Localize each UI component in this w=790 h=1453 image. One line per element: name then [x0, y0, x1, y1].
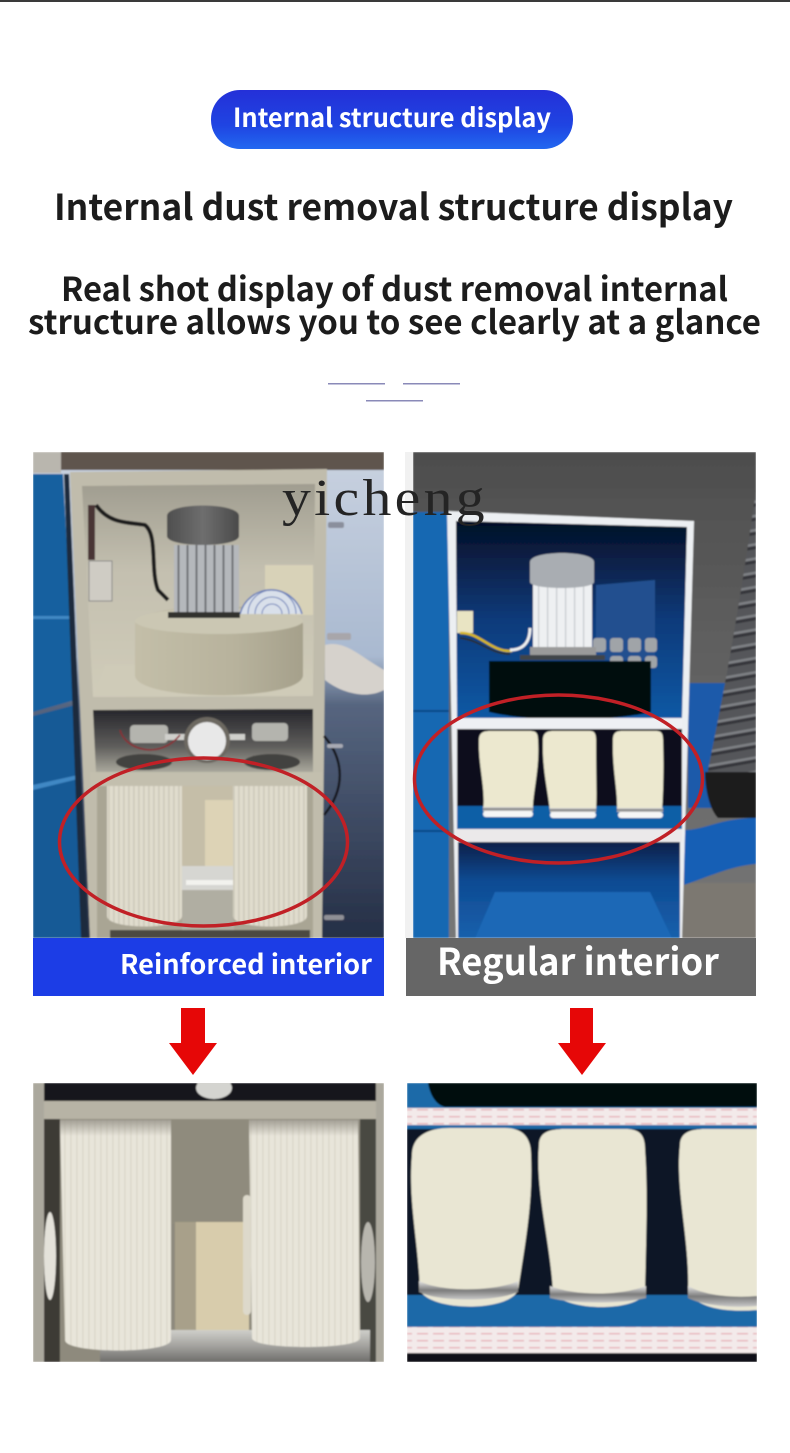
motor — [167, 506, 240, 618]
upper chamber — [82, 484, 315, 697]
watermark: yicheng — [282, 470, 488, 527]
panel: reinforced interior photo — [33, 452, 384, 938]
badge: Internal structure display: Internal structure display — [233, 98, 551, 135]
lower chamber with filters — [97, 786, 313, 938]
badge: Internal structure display — [211, 90, 573, 149]
shelf — [456, 829, 682, 842]
blue box behind — [688, 683, 728, 808]
caption bar: Regular interior — [406, 932, 756, 996]
panel: regular interior photo — [413, 452, 756, 938]
mesh guard — [240, 590, 302, 614]
shelf — [530, 716, 609, 720]
panel: filter bag close-up — [407, 1083, 757, 1362]
cabinet frame — [70, 469, 327, 938]
electric box and cable — [88, 505, 168, 601]
subheading: structure allows you to see clearly at a glance — [28, 296, 761, 344]
middle chamber with bags — [457, 729, 682, 829]
cabinet frame — [447, 511, 694, 938]
motor — [520, 553, 605, 660]
middle chamber — [93, 709, 313, 772]
caption bar: Reinforced interior — [33, 938, 384, 996]
panel: cartridge filter close-up — [33, 1077, 384, 1362]
subheading: Real shot display of dust removal internal — [61, 263, 728, 311]
subheading — [28, 263, 761, 344]
upper chamber — [456, 521, 687, 720]
bags — [411, 1128, 757, 1311]
arrow: left — [169, 1008, 217, 1075]
flexible duct — [707, 490, 756, 775]
heading: Internal dust removal structure display — [54, 179, 733, 231]
lower chamber — [458, 842, 680, 938]
callout ellipse: bags — [414, 695, 702, 863]
hose and fittings outside cabinet — [324, 522, 351, 920]
clamps — [483, 807, 663, 812]
right filter — [249, 1120, 360, 1347]
left filter — [60, 1120, 171, 1350]
black fan housing — [489, 661, 651, 720]
caption bar: Reinforced interior: Reinforced interior — [120, 943, 372, 982]
duct collar and pipe — [684, 772, 756, 885]
arrow: right — [558, 1008, 606, 1075]
caption bar: Regular interior: Regular interior — [437, 932, 720, 986]
perforated squares — [593, 638, 657, 668]
fan housing — [135, 606, 303, 695]
callout ellipse: filters — [60, 758, 348, 926]
blue cabinet beside unit — [33, 474, 88, 938]
terminal box and wires — [457, 611, 530, 654]
clamps — [419, 1281, 757, 1307]
base plate — [100, 1330, 370, 1362]
blue side door — [413, 512, 449, 938]
